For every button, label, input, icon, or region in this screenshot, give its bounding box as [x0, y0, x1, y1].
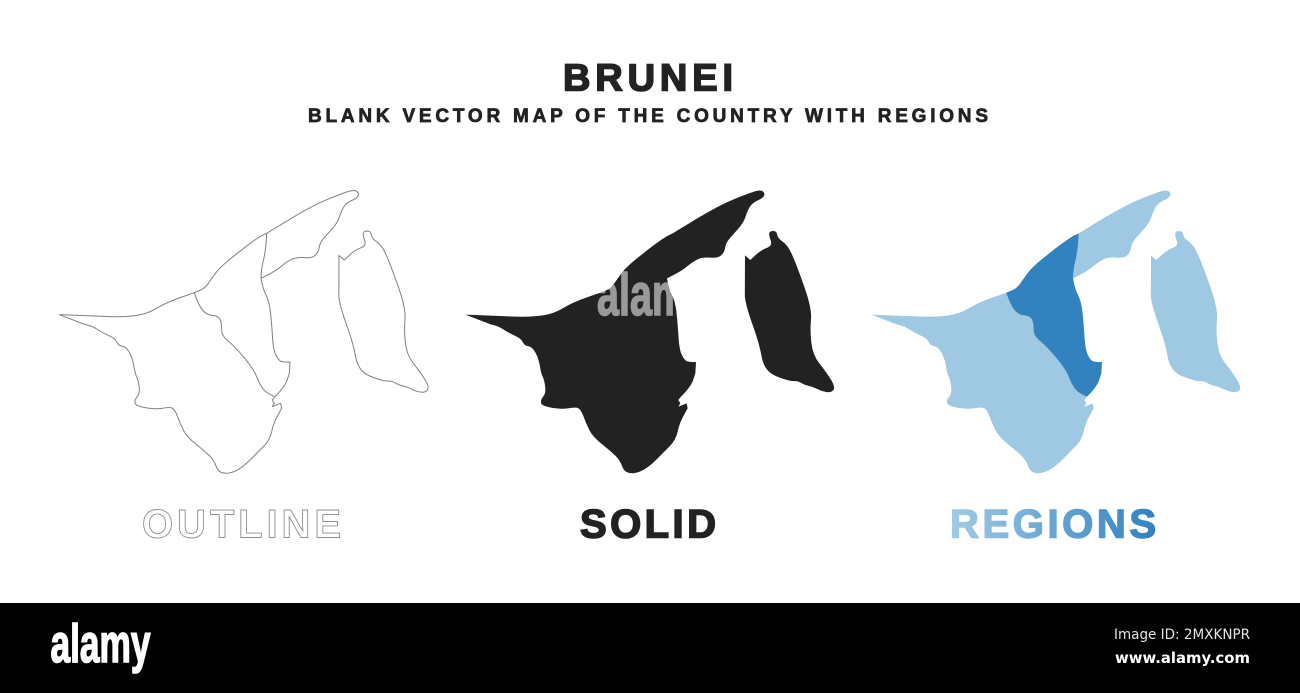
label: regions: REGIONS	[950, 502, 1156, 546]
map: outline	[59, 191, 428, 473]
image id: Image ID: 2MXKNPR	[1114, 627, 1250, 643]
watermark: alamy	[597, 262, 709, 328]
map: solid	[465, 191, 834, 473]
website: www.alamy.com	[1115, 649, 1250, 667]
label: outline: OUTLINE	[142, 502, 341, 546]
title: BRUNEI	[563, 58, 733, 100]
region: light districts	[871, 191, 1240, 473]
region: dark district	[1006, 233, 1102, 397]
subtitle: BLANK VECTOR MAP OF THE COUNTRY WITH REGIONS	[308, 106, 988, 127]
map: regions	[871, 191, 1240, 473]
footer bar	[0, 603, 1300, 693]
label: solid: SOLID	[580, 502, 716, 546]
logo: alamy: alamy	[50, 614, 150, 674]
